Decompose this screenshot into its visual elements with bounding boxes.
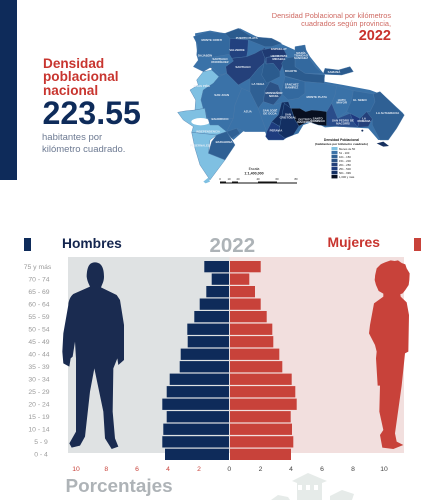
axis labels: women: 4 xyxy=(289,466,293,473)
age labels: 45 - 49 xyxy=(28,339,50,346)
heading: national density: poblacional xyxy=(43,69,119,84)
age labels: 10 - 14 xyxy=(28,426,50,434)
age labels: 65 - 69 xyxy=(28,289,50,296)
province labels: MARÍA xyxy=(296,50,307,55)
map scale bar: 1:1,400,000 xyxy=(244,172,264,176)
age labels: 40 - 44 xyxy=(28,352,50,358)
age labels: 20 - 24 xyxy=(28,402,50,408)
province labels: LA xyxy=(362,116,367,120)
province labels: TRINIDAD xyxy=(294,54,308,58)
legend marker: women xyxy=(414,238,420,251)
province labels: BAHORUCO xyxy=(211,117,229,121)
province labels: INDEPENDENCIA xyxy=(196,130,221,134)
density unit text: habitantes por xyxy=(42,132,102,143)
age labels: 60 - 64 xyxy=(28,302,50,308)
province labels: LA ALTAGRACIA xyxy=(376,111,400,115)
age labels: 15 - 19 xyxy=(28,414,50,421)
province labels: CRISTÓBAL xyxy=(280,114,297,120)
province labels: ESPAILLAT xyxy=(271,47,287,51)
province labels: RAMÍREZ xyxy=(285,84,299,90)
province labels: SAN JOSÉ xyxy=(263,108,277,112)
map legend: 501 - 999 xyxy=(339,171,351,175)
province labels: BARAHONA xyxy=(216,140,233,144)
icon: man silhouette xyxy=(62,262,124,449)
province labels: ROMANA xyxy=(357,119,371,123)
map title: Densidad Poblacional por kilómetros xyxy=(272,11,391,20)
province labels: DAJABÓN xyxy=(198,53,212,58)
province labels: MONTE PLATA xyxy=(306,95,328,99)
axis labels: women: 10 xyxy=(380,466,388,473)
map legend: 101 - 150 xyxy=(339,155,351,159)
heading: national density xyxy=(43,56,119,98)
age labels: 70 - 74 xyxy=(28,276,50,284)
province labels: MACORÍS xyxy=(336,120,350,126)
province labels: RODRÍGUEZ xyxy=(211,59,229,64)
legend marker: men xyxy=(24,238,31,251)
province labels: MIRABAL xyxy=(272,57,286,61)
map scale bar: Escala xyxy=(249,167,259,171)
map scale bar: 60 xyxy=(275,177,279,181)
province labels: AZUA xyxy=(244,110,253,114)
map title xyxy=(272,11,391,44)
axis labels: women: 6 xyxy=(320,466,324,473)
heading: Mujeres: Mujeres xyxy=(328,234,380,250)
density unit text: kilómetro cuadrado. xyxy=(42,144,125,154)
province labels: DUARTE xyxy=(285,69,297,73)
men bars xyxy=(162,261,229,460)
province labels: DOMINGO xyxy=(311,119,326,123)
province labels: SANTIAGO xyxy=(235,65,251,69)
heading: Hombres: Hombres xyxy=(62,236,122,251)
map title: cuadrados según provincia, xyxy=(301,19,391,28)
province labels: DISTRITO xyxy=(298,118,312,122)
axis labels: women: 8 xyxy=(351,466,355,473)
province labels: SANTIAGO xyxy=(212,57,228,61)
province labels: SAMANÁ xyxy=(328,69,341,74)
women bars xyxy=(230,261,297,460)
map legend: Menos de 50 xyxy=(339,147,356,151)
axis labels: women xyxy=(227,466,388,473)
axis labels: men: 2 xyxy=(197,466,201,473)
map legend: (habitantes por kilómetro cuadrado) xyxy=(315,142,368,146)
age labels: 75 y más xyxy=(24,264,52,271)
age labels: 30 - 34 xyxy=(28,376,50,384)
heading: national density: nacional xyxy=(43,83,98,98)
province labels: NOUEL xyxy=(269,94,279,98)
province labels: SÁNCHEZ xyxy=(285,82,299,86)
map title: 2022 xyxy=(359,28,391,44)
map scale bar: 80 xyxy=(294,177,298,181)
map legend: Densidad Poblacional xyxy=(324,138,359,142)
province labels: MONSEÑOR xyxy=(265,90,283,95)
axis labels: men xyxy=(72,466,201,473)
province labels: NACIONAL xyxy=(297,120,313,124)
province labels: MONTE CRISTI xyxy=(201,38,222,42)
age labels: 5 - 9 xyxy=(34,439,48,446)
map scale bar: 0 xyxy=(219,177,221,181)
decorative navy side bar xyxy=(0,0,17,180)
axis labels: women: 0 xyxy=(227,466,231,473)
axis labels: women: 2 xyxy=(259,466,263,473)
age labels: 55 - 59 xyxy=(28,314,50,321)
province labels: VALVERDE xyxy=(229,48,245,52)
province labels: LA VEGA xyxy=(252,82,265,86)
axis labels: men: 10 xyxy=(72,466,80,473)
map legend: 251 - 500 xyxy=(339,167,351,171)
age labels: 0 - 4 xyxy=(34,452,48,458)
age labels xyxy=(24,264,52,458)
province labels: SÁNCHEZ xyxy=(294,55,308,60)
axis labels: men: 8 xyxy=(104,466,108,473)
map legend: 151 - 200 xyxy=(339,159,351,163)
heading: national density: Densidad xyxy=(43,56,104,70)
map scale bar: 40 xyxy=(256,177,260,181)
map legend: 51 - 100 xyxy=(339,151,350,155)
province labels: SAN xyxy=(285,112,291,116)
province labels: PEDERNALES xyxy=(190,144,210,148)
map legend: 201 - 250 xyxy=(339,163,351,167)
province labels: HATO xyxy=(338,98,346,102)
map legend xyxy=(315,138,368,179)
map legend: 1,000 y más xyxy=(339,175,355,179)
icon: woman silhouette xyxy=(369,260,410,449)
axis title: Porcentajes: Porcentajes xyxy=(66,476,173,496)
heading: 2022: 2022 xyxy=(210,234,255,257)
province labels: SAN PEDRO DE xyxy=(332,118,354,122)
province labels: ELÍAS PIÑA xyxy=(194,83,211,88)
province labels: SAN JUAN xyxy=(214,93,229,97)
axis labels: men: 4 xyxy=(166,466,170,473)
map scale bar: 20 xyxy=(236,177,240,181)
big number: 223.55 xyxy=(42,95,141,131)
density unit text xyxy=(42,132,125,154)
province labels: DE OCOA xyxy=(263,112,278,116)
province labels xyxy=(190,36,400,148)
province labels: SANTO xyxy=(313,116,323,120)
map scale bar: 10 xyxy=(227,177,231,181)
age labels: 35 - 39 xyxy=(28,364,50,371)
age labels: 50 - 54 xyxy=(28,326,50,334)
axis labels: men: 6 xyxy=(135,466,139,473)
age labels: 25 - 29 xyxy=(28,389,50,396)
map of provinces xyxy=(177,28,404,184)
province labels: EL SEIBO xyxy=(353,98,367,102)
province labels: MAYOR xyxy=(336,100,348,104)
map scale bar xyxy=(219,167,298,184)
province labels: HERMANAS xyxy=(271,54,287,58)
province labels: PUERTO PLATA xyxy=(236,36,259,40)
province labels: PERAVIA xyxy=(270,128,283,132)
